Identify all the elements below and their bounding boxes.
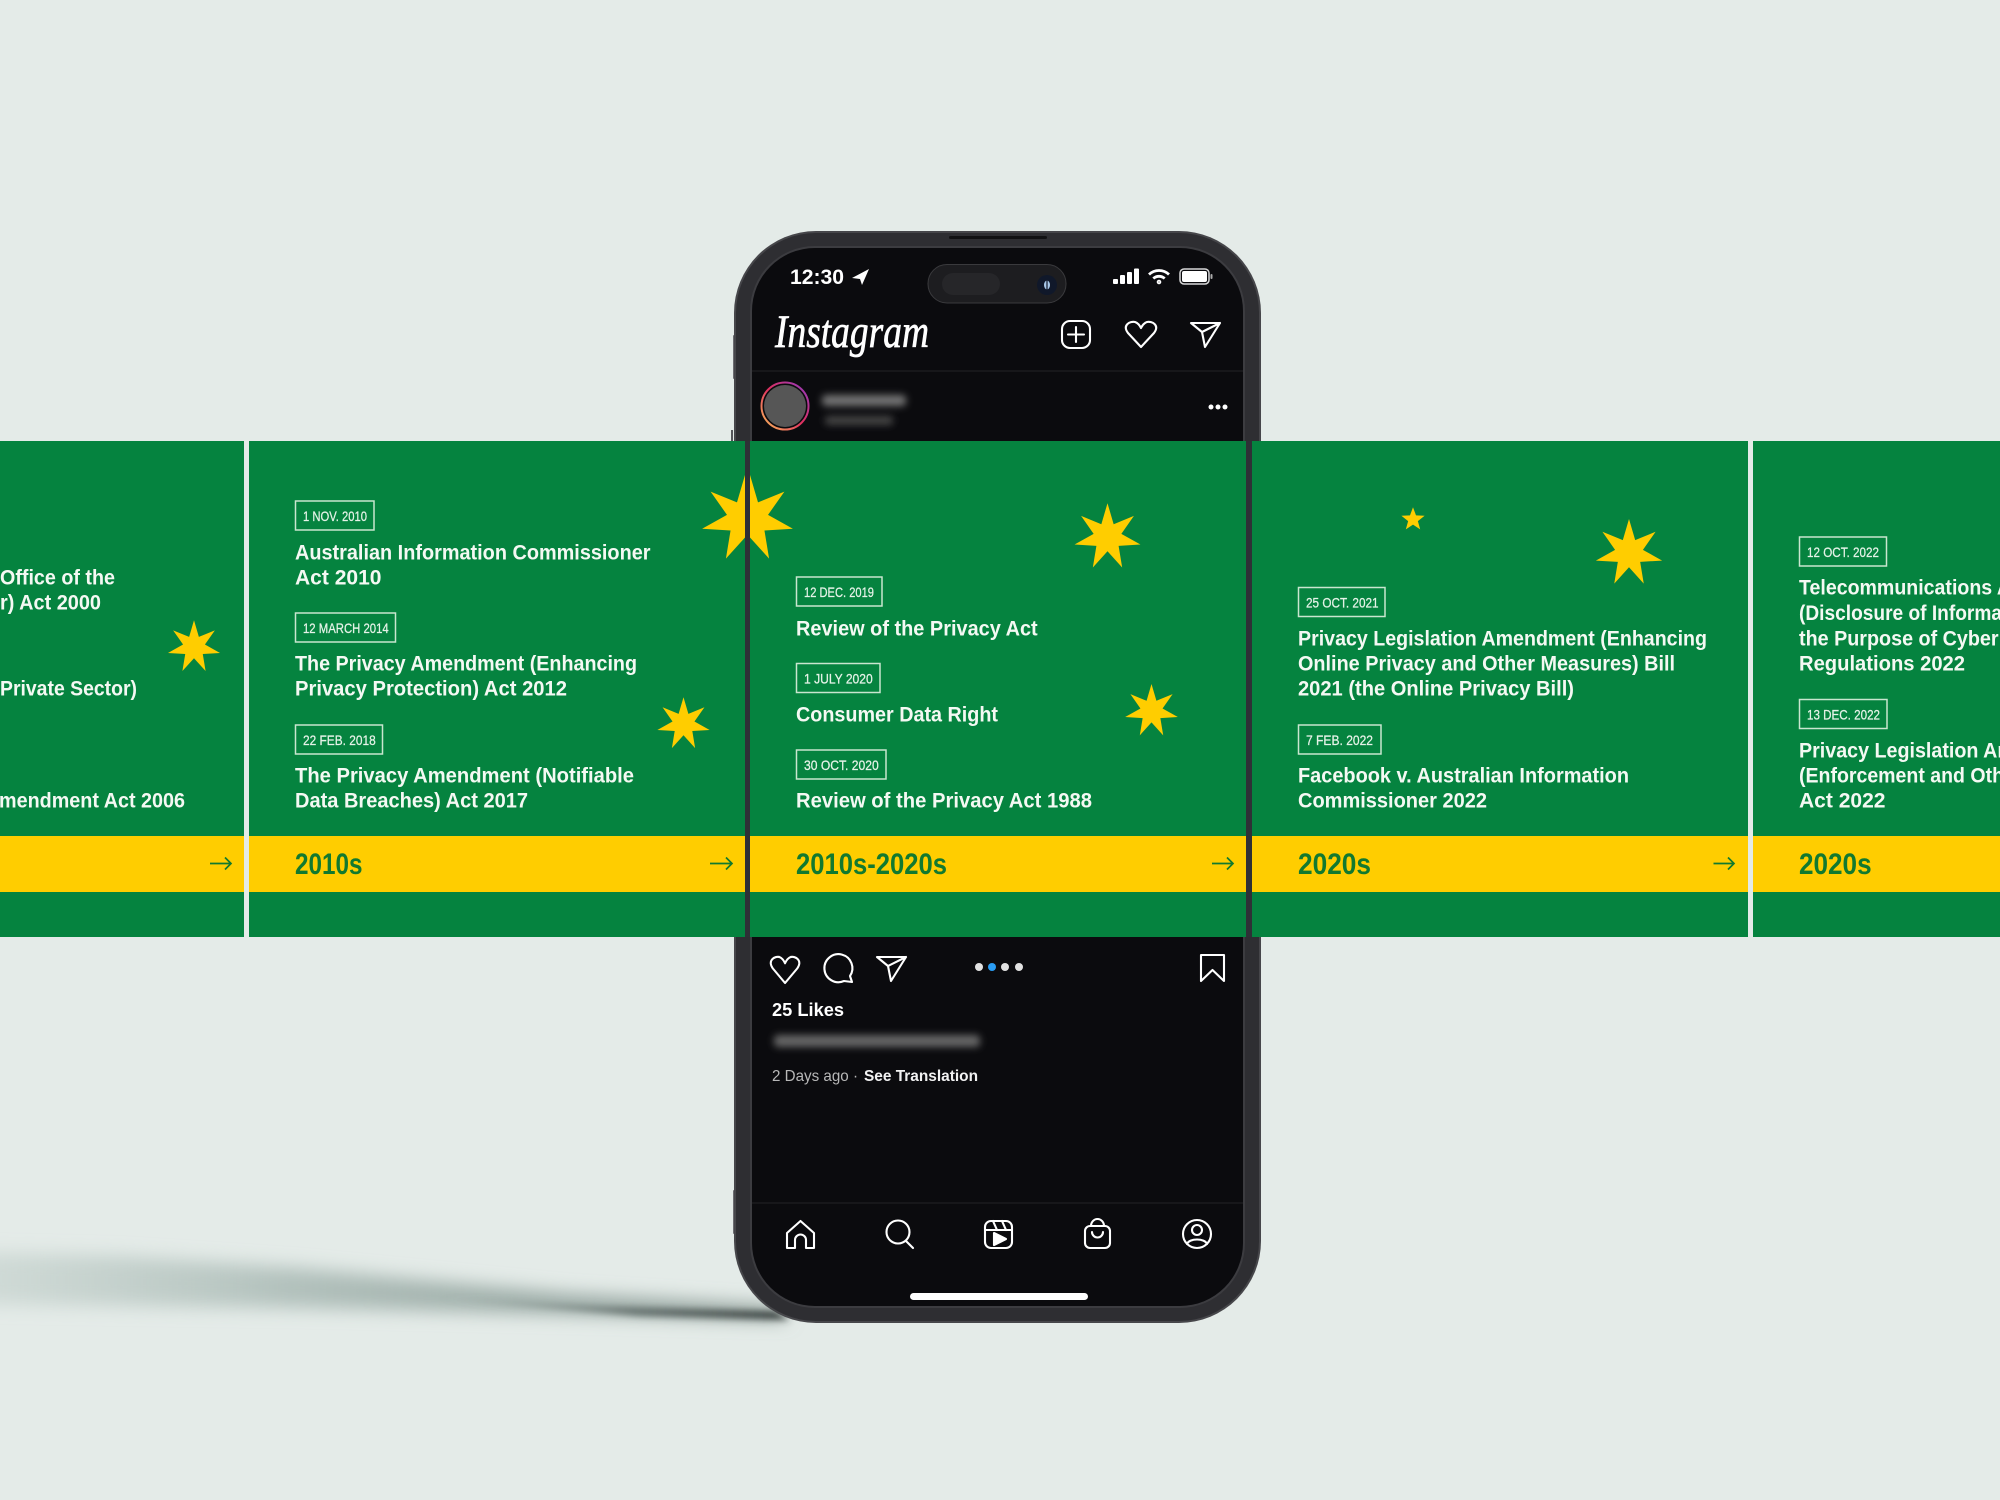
yellow bar — [1753, 836, 2000, 892]
app header — [774, 306, 1220, 358]
phone mockup — [731, 231, 1261, 1323]
entry: Notifiable Data Breaches: 22 FEB. 2018 — [303, 732, 376, 748]
star — [657, 697, 710, 748]
icon: wifi — [1149, 270, 1169, 283]
text fragments: Private Sector) — [0, 677, 137, 700]
icon: like — [771, 957, 799, 983]
entry: Review of the Privacy Act: Review of the Privacy Act — [796, 617, 1038, 640]
icon: search — [886, 1220, 913, 1248]
avatar — [762, 382, 808, 430]
panel: 2020s — [1252, 441, 1748, 937]
entry: Review of the Privacy Act 1988 — [796, 750, 1092, 812]
entry: Australian Information Commissioner Act: 1 NOV. 2010 — [303, 508, 367, 524]
entry: Enhancing Privacy Protection — [295, 613, 637, 700]
icon: comment — [824, 954, 852, 982]
panel: 2010s-2020s — [707, 441, 1246, 937]
arrow — [710, 858, 732, 870]
yellow bar — [249, 836, 745, 892]
entry: Enhancing Privacy Protection: 12 MARCH 2014 — [303, 620, 389, 636]
entry: Privacy Legislation Amendment Act 2022 — [1799, 700, 2000, 812]
icon: profile — [1183, 1220, 1211, 1248]
entry: Australian Information Commissioner Act: Act 2010 — [295, 566, 382, 589]
entry: Review of the Privacy Act 1988: 30 OCT. 2020 — [804, 757, 879, 773]
entry: Facebook v. Australian Information Commissioner: Commissioner 2022 — [1298, 789, 1487, 812]
panel: right cropped slide — [1753, 441, 2000, 937]
post caption — [772, 999, 980, 1085]
yellow bar — [0, 836, 244, 892]
entry: Online Privacy Bill: Online Privacy and Other Measures) Bill — [1298, 652, 1675, 675]
icon: home — [787, 1221, 814, 1248]
timestamp: 2 Days ago · — [772, 1068, 858, 1085]
entry: Consumer Data Right: Consumer Data Right — [796, 703, 998, 726]
blurred caption — [774, 1035, 980, 1047]
icon: more dots — [1208, 404, 1228, 410]
post header — [762, 382, 1228, 430]
panel: 2010s — [249, 441, 788, 937]
year label: 2020s — [1298, 848, 1371, 881]
entry: Online Privacy Bill: 25 OCT. 2021 — [1306, 594, 1379, 610]
Instagram wordmark: Instagram — [774, 306, 929, 358]
star: left half of large star — [702, 475, 745, 558]
icon: heart — [1126, 322, 1156, 347]
star: right half of large star — [750, 475, 793, 558]
blurred username — [822, 395, 906, 425]
entry: Consumer Data Right: 1 JULY 2020 — [804, 670, 873, 686]
icon: send — [1191, 323, 1220, 347]
yellow bar — [1252, 836, 1748, 892]
text fragments — [0, 566, 185, 812]
entry: Review of the Privacy Act — [796, 577, 1038, 640]
text fragments: Office of the — [0, 566, 115, 589]
entry: Notifiable Data Breaches: Data Breaches) Act 2017 — [295, 789, 528, 812]
likes count: 25 Likes — [772, 999, 844, 1020]
yellow bar — [750, 836, 1246, 892]
icon: share — [877, 957, 906, 981]
bottom navigation — [787, 1219, 1211, 1248]
text fragments: mendment Act 2006 — [0, 789, 185, 812]
entry: Australian Information Commissioner Act — [295, 501, 650, 589]
small star — [1401, 507, 1425, 529]
entry: Facebook v. Australian Information Commissioner — [1298, 725, 1629, 812]
star — [1125, 684, 1178, 735]
entry: Telecommunications regulations: Regulations 2022 — [1799, 652, 1965, 675]
entry: Online Privacy Bill — [1298, 588, 1707, 700]
entry: Notifiable Data Breaches: The Privacy Amendment (Notifiable — [295, 764, 634, 787]
entry: Telecommunications regulations — [1799, 537, 2000, 675]
text fragments: r) Act 2000 — [0, 591, 101, 614]
icon: bookmark — [1201, 955, 1224, 981]
entry: Privacy Legislation Amendment Act 2022: 13 DEC. 2022 — [1807, 706, 1880, 722]
icon: battery — [1180, 269, 1212, 284]
see translation: See Translation — [864, 1068, 978, 1085]
entry: Facebook v. Australian Information Commissioner: 7 FEB. 2022 — [1306, 732, 1373, 748]
year label: 2020s — [1799, 848, 1872, 881]
entry: Privacy Legislation Amendment Act 2022: Act 2022 — [1799, 789, 1886, 812]
icon: shop — [1085, 1219, 1110, 1248]
arrow — [1212, 858, 1233, 870]
phone frame — [731, 231, 1261, 1323]
entry: Enhancing Privacy Protection: Privacy Protection) Act 2012 — [295, 677, 567, 700]
panel: strip edges in phone bezel — [745, 441, 1252, 937]
icon: signal — [1113, 268, 1139, 284]
icon: location arrow — [852, 269, 869, 285]
post actions — [771, 954, 1224, 983]
year label: 2010s-2020s — [796, 848, 947, 881]
entry: Australian Information Commissioner Act: Australian Information Commissioner — [295, 541, 650, 564]
star — [168, 620, 220, 671]
entry: Telecommunications regulations: 12 OCT. 2022 — [1807, 544, 1879, 560]
phone shadow — [0, 1252, 790, 1320]
entry: Notifiable Data Breaches — [295, 725, 634, 812]
entry: Online Privacy Bill: Privacy Legislation Amendment (Enhancing — [1298, 627, 1707, 650]
status time: 12:30 — [790, 265, 844, 289]
entry: Consumer Data Right — [796, 664, 998, 726]
star — [1075, 503, 1140, 567]
entry: Review of the Privacy Act 1988: Review of the Privacy Act 1988 — [796, 789, 1092, 812]
dynamic island — [928, 264, 1066, 303]
icon: new post — [1062, 321, 1090, 348]
icon: reels — [985, 1221, 1012, 1248]
panel: left cropped slide — [0, 441, 244, 937]
year label: 2010s — [295, 848, 362, 881]
home indicator — [910, 1293, 1088, 1300]
carousel dots — [975, 963, 1023, 971]
entry: Facebook v. Australian Information Commissioner: Facebook v. Australian Information — [1298, 764, 1629, 787]
arrow — [210, 858, 231, 870]
star — [1596, 519, 1662, 584]
entry: Enhancing Privacy Protection: The Privacy Amendment (Enhancing — [295, 652, 637, 675]
entry: Online Privacy Bill: 2021 (the Online Privacy Bill) — [1298, 677, 1574, 700]
arrow — [1714, 858, 1734, 870]
entry: Review of the Privacy Act: 12 DEC. 2019 — [804, 584, 874, 600]
status bar — [790, 264, 1212, 303]
